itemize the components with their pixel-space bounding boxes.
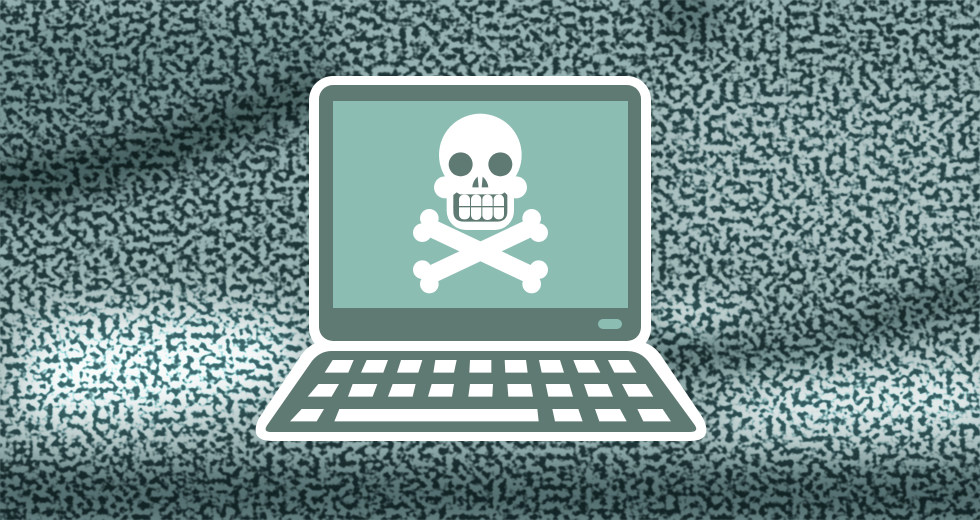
keyboard base (266, 351, 696, 432)
crossbones (413, 209, 548, 293)
eye sockets (449, 152, 512, 176)
skull head (434, 114, 527, 230)
nose (472, 177, 488, 187)
laptop (256, 76, 706, 441)
teeth (453, 192, 507, 222)
laptop lid (319, 85, 641, 341)
icon: skull and crossbones (413, 114, 548, 293)
keyboard keys (290, 360, 671, 421)
laptop white outline (256, 76, 706, 441)
power button (598, 319, 622, 329)
screen (333, 101, 628, 308)
